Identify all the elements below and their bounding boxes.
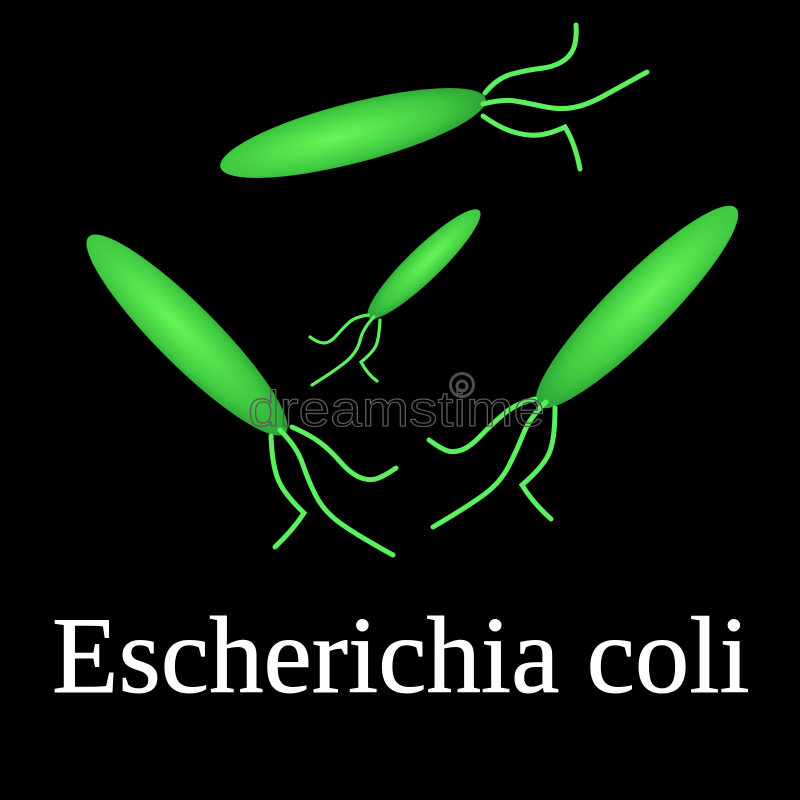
small cell body — [357, 199, 491, 329]
watermark text: dreamstime — [248, 381, 545, 437]
top flagella — [483, 25, 647, 169]
small flagella — [310, 315, 380, 385]
watermark spiral icon — [450, 374, 474, 396]
left cell body — [67, 215, 307, 455]
right cell body — [517, 187, 757, 427]
bacterium: right — [429, 187, 757, 527]
left flagella — [271, 427, 396, 555]
right flagella — [429, 399, 555, 527]
bacterium: left — [67, 215, 396, 555]
watermark — [248, 374, 545, 437]
bacterium: small centre — [310, 199, 491, 385]
top cell body — [213, 70, 493, 196]
bacterium: top — [213, 25, 647, 196]
title: Escherichia coli — [52, 595, 750, 716]
